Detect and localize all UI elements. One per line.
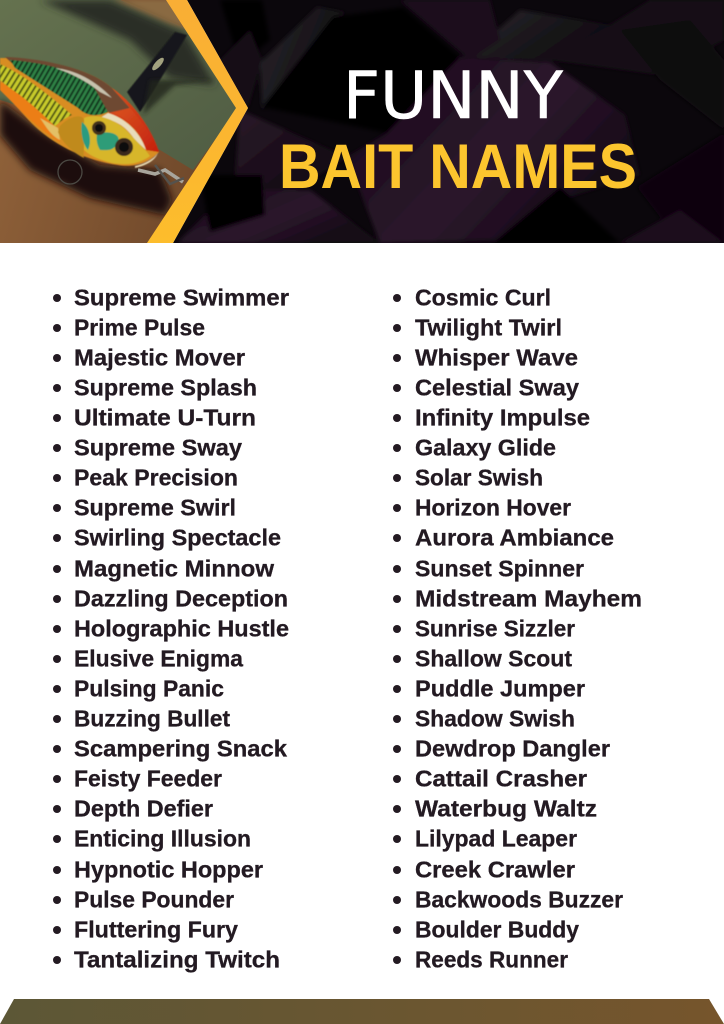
list: left column: [53, 284, 289, 972]
list: left column: Supreme Sway: [74, 434, 242, 460]
list: right column: Dewdrop Dangler: [415, 736, 610, 762]
cream throat: [40, 118, 60, 140]
list: left column: Majestic Mover: [74, 344, 245, 370]
list: right column: Twilight Twirl: [415, 314, 562, 340]
list: right column: Midstream Mayhem: [415, 586, 642, 612]
list: left column: Feisty Feeder: [74, 766, 222, 792]
list: right column: Reeds Runner: [415, 946, 568, 972]
list: left column: Ultimate U-Turn: [74, 404, 256, 430]
header banner: [0, 0, 724, 243]
list: left column: Supreme Swimmer: [74, 284, 289, 310]
footer band: [0, 999, 724, 1024]
photo: fishing lure on wood: [0, 0, 240, 243]
list: left column: Hypnotic Hopper: [74, 856, 263, 882]
list: right column: Galaxy Glide: [415, 434, 556, 460]
list: left column: Elusive Enigma: [74, 646, 243, 672]
list: right column: Sunrise Sizzler: [415, 616, 575, 642]
list: right column: Waterbug Waltz: [415, 796, 597, 822]
list: right column: Horizon Hover: [415, 494, 571, 520]
list: right column: Lilypad Leaper: [415, 826, 577, 852]
list: right column: Solar Swish: [415, 464, 543, 490]
list: left column: Depth Defier: [74, 796, 213, 822]
panel: dark geometric background: [170, 0, 724, 243]
list: right column: Sunset Spinner: [415, 556, 584, 582]
list: left column: Tantalizing Twitch: [74, 946, 280, 972]
list: left column: Scampering Snack: [74, 736, 287, 762]
list: left column: Pulsing Panic: [74, 676, 224, 702]
list: right column: Aurora Ambiance: [415, 524, 614, 550]
lure shadow: [0, 100, 172, 215]
list: left column: Enticing Illusion: [74, 826, 251, 852]
list: right column: Puddle Jumper: [415, 676, 585, 702]
hook ring and chain: [58, 160, 184, 184]
list: left column: Swirling Spectacle: [74, 524, 281, 550]
eyes: [115, 138, 133, 156]
list: left column: Dazzling Deception: [74, 586, 288, 612]
rod shadow band: [40, 0, 215, 85]
red head: [108, 88, 159, 152]
green cloth: [0, 0, 238, 170]
list: left column: Peak Precision: [74, 464, 238, 490]
list: left column: Buzzing Bullet: [74, 706, 230, 732]
lure body: [0, 57, 159, 168]
list: left column: Prime Pulse: [74, 314, 205, 340]
face: [84, 116, 150, 164]
list: right column: Cattail Crasher: [415, 766, 587, 792]
wood table: [0, 0, 240, 243]
list: left column: Pulse Pounder: [74, 886, 234, 912]
list: left column: Supreme Splash: [74, 374, 257, 400]
list: left column: Holographic Hustle: [74, 616, 289, 642]
title: BAIT NAMES: BAIT NAMES: [279, 132, 637, 202]
list: right column: Infinity Impulse: [415, 404, 590, 430]
list: left column: Fluttering Fury: [74, 916, 238, 942]
list: right column: Celestial Sway: [415, 374, 579, 400]
title: FUNNY: FUNNY: [343, 59, 563, 134]
list: right column: Cosmic Curl: [415, 284, 551, 310]
list: left column: Magnetic Minnow: [74, 556, 274, 582]
orange belly: [0, 82, 60, 142]
back: [5, 57, 130, 113]
list: right column: Shallow Scout: [415, 646, 572, 672]
list: left column: Supreme Swirl: [74, 494, 236, 520]
chevron accent: [147, 0, 248, 243]
list: right column: [393, 284, 642, 972]
list: right column: Backwoods Buzzer: [415, 886, 623, 912]
highlight on back: [55, 68, 112, 98]
list: right column: Boulder Buddy: [415, 916, 579, 942]
yellow scale stripe: [0, 64, 72, 126]
background tan strip: [112, 0, 190, 30]
list: right column: Shadow Swish: [415, 706, 575, 732]
gold cheek: [58, 116, 85, 158]
list: right column: Whisper Wave: [415, 344, 578, 370]
fishing rod: [126, 32, 202, 115]
list: right column: Creek Crawler: [415, 856, 575, 882]
